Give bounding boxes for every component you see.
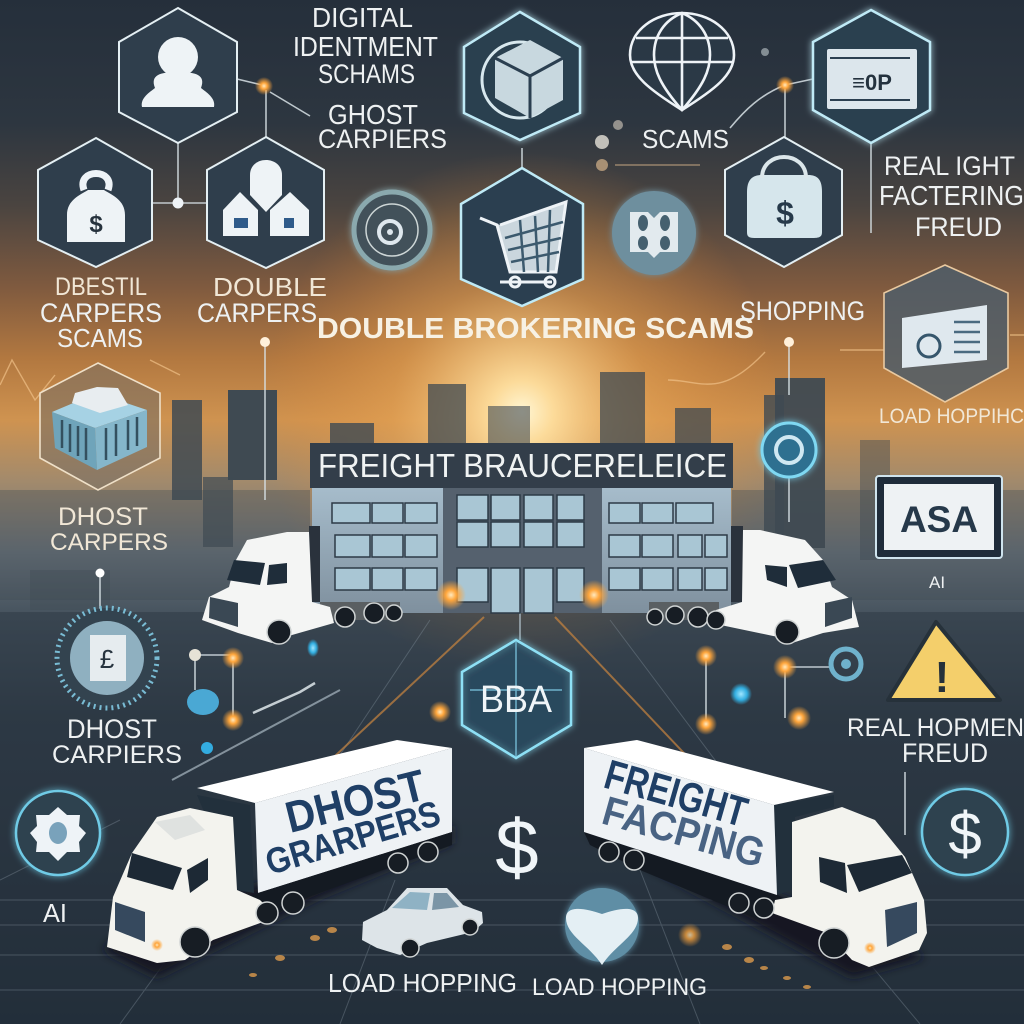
truck: lower left, dhost grarpers bbox=[103, 740, 452, 977]
icon: connector line bbox=[260, 337, 270, 500]
text: ghost carpiers: GHOST bbox=[328, 99, 418, 130]
text: real hopment freud: REAL HOPMEN bbox=[847, 714, 1024, 742]
building sign: FREIGHT BRAUCERELEICE bbox=[318, 447, 727, 484]
road lines bbox=[172, 610, 700, 780]
text: double carpers: CARPERS bbox=[197, 298, 317, 328]
icon: ring target right bbox=[831, 649, 861, 679]
text: scams: SCAMS bbox=[642, 124, 729, 154]
truck: lower right, freight facping bbox=[584, 740, 927, 977]
text: ghost carpiers: CARPIERS bbox=[318, 124, 447, 154]
text: shopping: SHOPPING bbox=[740, 296, 865, 326]
truck: upper left bbox=[202, 526, 402, 644]
icon: warehouse hexagon bbox=[40, 363, 160, 490]
icon: orange trail lights bbox=[249, 923, 811, 989]
text: dhost carpiers lower left: CARPIERS bbox=[52, 741, 182, 769]
icon: document hexagon: ≡0P bbox=[852, 70, 892, 95]
text: dhost carpiers lower left bbox=[52, 714, 182, 769]
text: load hopping right bottom: LOAD HOPPING bbox=[532, 974, 707, 1001]
icon: monitor asa: ASA bbox=[900, 499, 978, 540]
building: freight brokerage bbox=[310, 443, 733, 613]
text: ai left: AI bbox=[43, 898, 67, 928]
text: real light factering freud: FREUD bbox=[915, 212, 1002, 242]
text: digital identment schams: DIGITAL bbox=[312, 2, 413, 33]
trailer lettering: GRARPERS bbox=[261, 792, 445, 883]
icon: buildings hexagon bbox=[207, 137, 324, 268]
text: real hopment freud bbox=[847, 714, 1024, 768]
text: digital identment schams: IDENTMENT bbox=[293, 31, 438, 62]
icon: clover disc bbox=[612, 191, 696, 275]
trailer lettering: FACPING bbox=[598, 787, 770, 877]
icon: money bag hexagon: $ bbox=[89, 211, 103, 238]
text: dhost carpiers lower left: DHOST bbox=[67, 714, 157, 744]
title: double brokering scams: DOUBLE BROKERING SCAMS bbox=[317, 313, 754, 345]
icon: monitor asa bbox=[876, 476, 1002, 558]
icon: heart badge bbox=[565, 888, 639, 965]
icon: cube hexagon bbox=[464, 12, 580, 140]
road perspective and grid floor bbox=[0, 620, 1024, 1024]
icon: shopping cart hexagon bbox=[461, 148, 583, 306]
text: real hopment freud: FREUD bbox=[902, 738, 988, 768]
icon: money bag hexagon bbox=[38, 138, 152, 267]
text: digital carpers scams: CARPERS bbox=[40, 298, 162, 328]
icon: connector node above camera bbox=[784, 337, 794, 395]
text: real light factering freud: REAL IGHT bbox=[884, 151, 1015, 181]
text: ghost carriers left bbox=[50, 503, 168, 556]
city skyline bbox=[0, 372, 1024, 610]
icon: person hexagon bbox=[119, 8, 237, 143]
icon: bba globe hexagon: BBA bbox=[480, 679, 553, 721]
text: ghost carriers left: DHOST bbox=[58, 503, 148, 531]
icon: network nodes and lights bbox=[187, 580, 830, 754]
icon: spiral disc bbox=[354, 192, 430, 268]
trailer lettering: DHOST bbox=[281, 761, 430, 843]
icon: id card hexagon bbox=[884, 265, 1008, 402]
thin orange circuit traces bbox=[0, 335, 1024, 400]
road surface bbox=[0, 612, 1024, 1024]
text: digital carpers scams: DBESTIL bbox=[55, 273, 147, 301]
text: ghost carriers left: CARPERS bbox=[50, 529, 168, 556]
icon: shopping bag hexagon: $ bbox=[776, 195, 794, 231]
icon: lock ring left bbox=[57, 568, 157, 708]
icon: shopping bag hexagon bbox=[725, 76, 871, 267]
text: digital identment schams: SCHAMS bbox=[318, 59, 415, 89]
icon: document hexagon bbox=[813, 10, 930, 143]
icon: globe bbox=[630, 13, 734, 110]
truck: upper right bbox=[647, 526, 859, 644]
icon: dollar sign center: $ bbox=[495, 803, 539, 891]
text: ghost carpiers bbox=[318, 99, 447, 154]
text: digital carpers scams bbox=[40, 273, 162, 353]
text: double carpers bbox=[197, 272, 327, 328]
text: ai right: AI bbox=[929, 573, 945, 592]
icon: warning triangle: ! bbox=[935, 653, 949, 702]
panel: digital identity hexagon group bbox=[38, 8, 324, 268]
icon: bba globe hexagon bbox=[462, 640, 571, 758]
icon: wrench bbox=[253, 683, 315, 713]
icon: warning triangle bbox=[888, 622, 1000, 702]
text: real light factering freud bbox=[879, 151, 1024, 242]
icon: dollar circle right: $ bbox=[948, 800, 982, 867]
icon: blurry lights near scams bbox=[595, 48, 769, 171]
icon: car bbox=[362, 888, 483, 957]
trailer lettering bbox=[598, 750, 770, 877]
icon: dollar circle right bbox=[922, 789, 1008, 875]
text: double carpers: DOUBLE bbox=[213, 272, 327, 302]
trailer lettering: FREIGHT bbox=[600, 750, 753, 836]
icon: gear circle left bbox=[16, 791, 100, 875]
building windows bbox=[332, 495, 727, 613]
text: digital carpers scams: SCAMS bbox=[57, 323, 143, 353]
text: load hopping left: LOAD HOPPING bbox=[328, 968, 517, 998]
text: digital identment schams bbox=[293, 2, 438, 89]
icon: camera ring bbox=[762, 423, 816, 522]
icon: lock ring left: £ bbox=[100, 644, 115, 674]
